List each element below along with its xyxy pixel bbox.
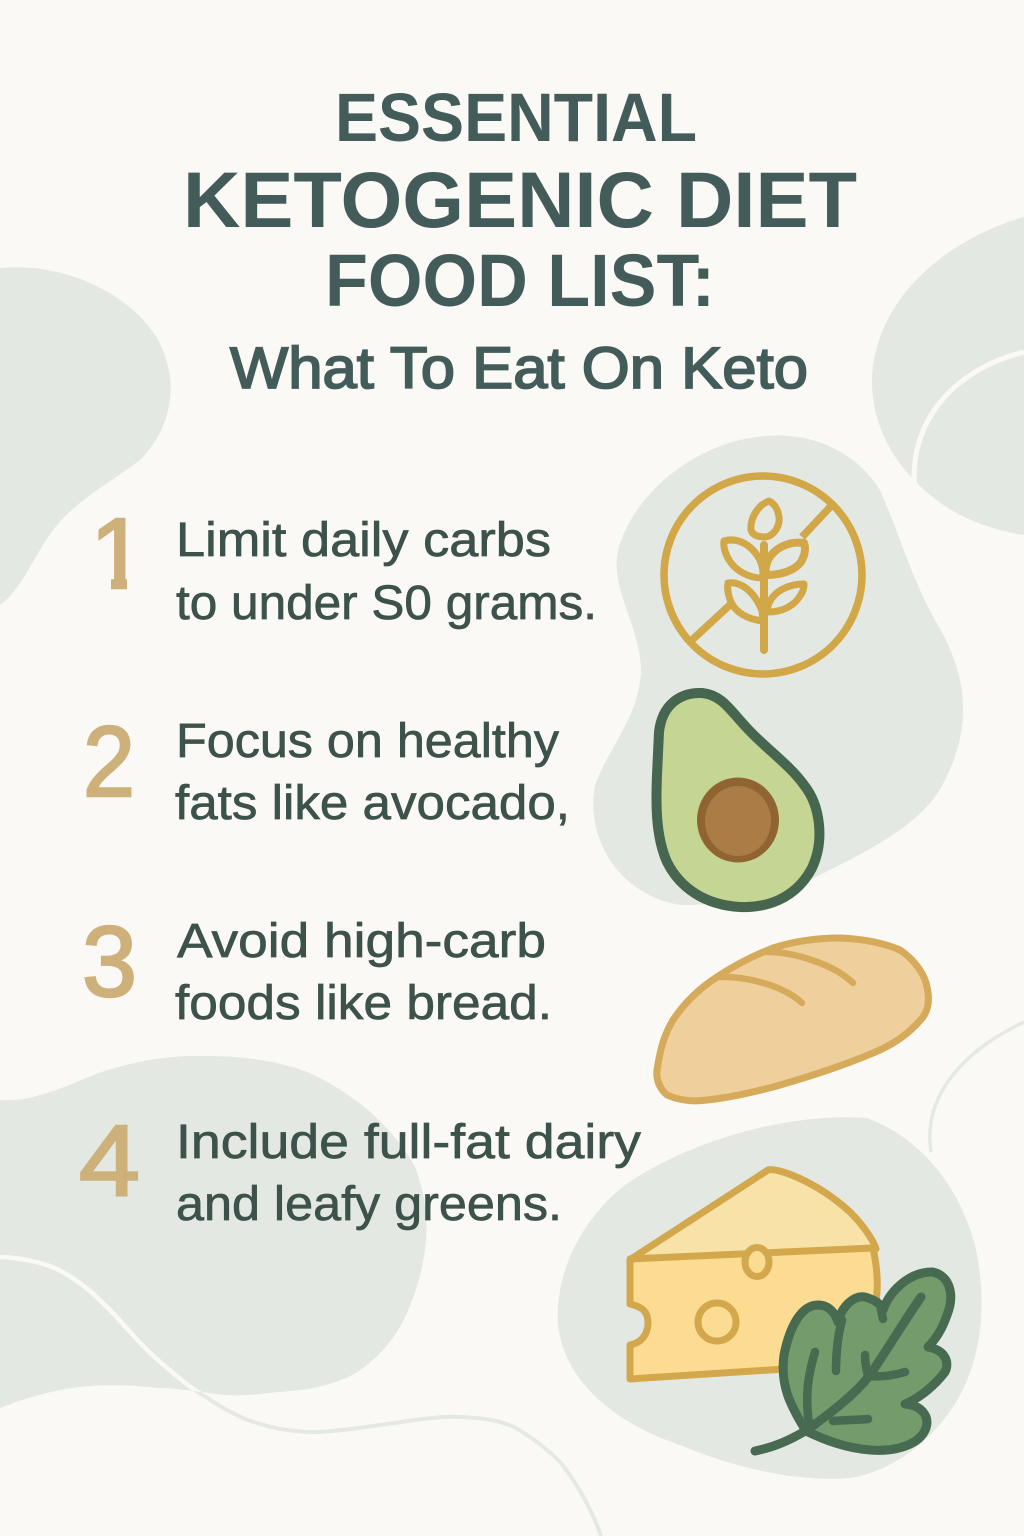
step 4: [79, 1105, 641, 1231]
number 4: 4: [79, 1105, 140, 1217]
step 2 text: [175, 715, 570, 830]
decorative blob: lower right: [558, 1117, 982, 1479]
step 2: [83, 706, 570, 830]
step 4 text: and leafy greens.: [176, 1178, 562, 1231]
step 1 text: Limit daily carbs: [176, 514, 551, 567]
decorative curve: lower right: [930, 1022, 1024, 1152]
decorative blob: middle right: [593, 435, 963, 905]
icon: cheese: [630, 1170, 877, 1379]
decorative blob: upper left: [0, 267, 171, 605]
avocado flesh: [656, 693, 819, 907]
subtitle: What To Eat On Keto: [230, 336, 808, 401]
step 1 text: [176, 514, 597, 630]
decorative curve: lower left: [0, 1257, 601, 1536]
step 1 text: to under S0 grams.: [176, 577, 597, 630]
step 2 text: Focus on healthy: [176, 715, 559, 768]
leaf veins: [755, 1297, 921, 1451]
cheese hole top: [745, 1248, 769, 1276]
step 1: [98, 518, 593, 630]
number 3: 3: [82, 906, 137, 1018]
step 3 text: [175, 915, 552, 1030]
number 1: 1: [90, 498, 146, 610]
bread loaf: [657, 938, 928, 1101]
bread score marks: [718, 952, 853, 1003]
icon: bread: [657, 938, 928, 1101]
title: [183, 79, 857, 401]
title line 1: ESSENTIAL: [335, 79, 697, 156]
cheese front: [630, 1248, 877, 1379]
step 2 text: fats like avocado,: [175, 777, 570, 830]
icon: no grain: [664, 476, 862, 674]
title line 3: FOOD LIST:: [325, 239, 715, 322]
step 4 text: [176, 1116, 641, 1231]
decorative blob: upper right: [872, 217, 1024, 535]
cheese hole: [698, 1303, 736, 1341]
icon: avocado: [656, 693, 819, 907]
title line 2: KETOGENIC DIET: [183, 155, 857, 244]
leaf body: [783, 1272, 951, 1450]
step 3 text: foods like bread.: [175, 977, 552, 1030]
step 3: [82, 906, 552, 1030]
number 2: 2: [83, 706, 135, 818]
icon: leafy green: [755, 1272, 951, 1451]
cheese top: [631, 1170, 876, 1259]
decorative blob: lower left: [0, 1056, 427, 1408]
step 4 text: Include full-fat dairy: [176, 1116, 641, 1169]
avocado pit: [697, 778, 779, 862]
step 3 text: Avoid high-carb: [177, 915, 546, 968]
